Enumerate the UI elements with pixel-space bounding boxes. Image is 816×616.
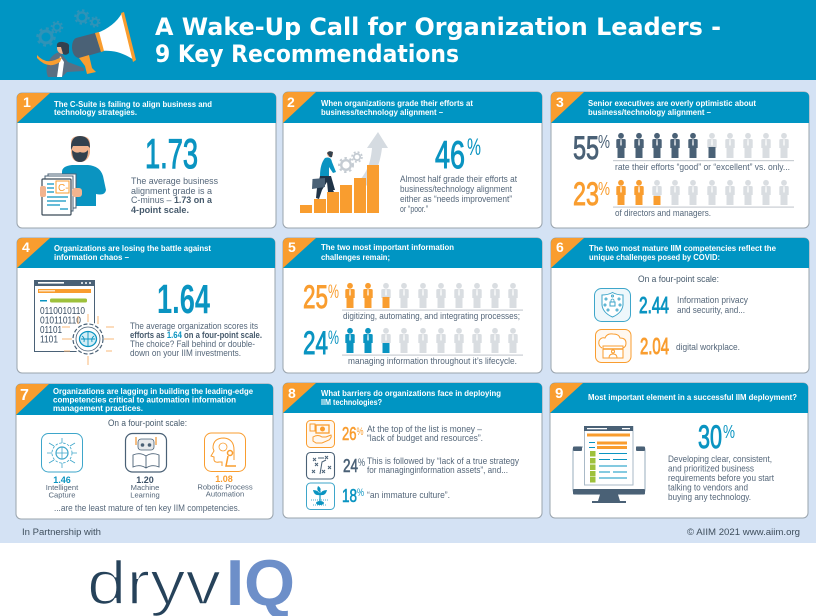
label: Automation: [206, 490, 244, 498]
panel 2: grading efforts: [283, 92, 542, 228]
stat: 23%: %: [598, 179, 610, 199]
label: [197, 482, 253, 498]
description: and prioritized business: [668, 464, 754, 474]
panel 5: information challenges: 5: [288, 239, 296, 255]
description: The average business: [131, 176, 218, 186]
stat: 25%: 25: [303, 279, 328, 315]
heading: When organizations grade their efforts at: [321, 98, 473, 108]
value: 1.20: [136, 475, 154, 485]
text: “lack of budget and resources”.: [367, 433, 483, 443]
heading: management practices.: [53, 403, 143, 413]
stat: 25%: %: [328, 282, 339, 303]
label: Machine: [131, 483, 159, 492]
heading: business/technology alignment –: [321, 107, 443, 117]
stat: 46%: %: [467, 134, 481, 161]
stat: 24%: 24: [343, 455, 358, 476]
description: either as “needs improvement”: [400, 194, 512, 204]
label: and security, and...: [677, 305, 745, 315]
stat: 30%: %: [723, 422, 735, 442]
stat: 1.64: 1.64: [157, 276, 210, 322]
stat: 18%: 18: [342, 485, 357, 506]
stat: 30%: 30: [698, 419, 722, 455]
stat: 55%: %: [598, 132, 610, 152]
header banner: [0, 0, 816, 80]
stat: 26%: 26: [342, 423, 356, 444]
description: talking to vendors and: [668, 482, 748, 492]
stat: 18%: %: [357, 487, 364, 499]
heading: Senior executives are overly optimistic about: [588, 98, 756, 108]
heading: [321, 98, 473, 117]
pictogram: 55 percent: [613, 133, 794, 161]
stat: 2.04: 2.04: [640, 333, 669, 359]
panel 6: mature competencies: 6: [556, 239, 564, 255]
panel 2: grading efforts: 2: [287, 94, 295, 110]
icon: monitor with checklist: [573, 426, 645, 503]
label: [677, 295, 748, 315]
caption: of directors and managers.: [615, 208, 711, 218]
caption: digitizing, automating, and integrating processes;: [343, 311, 520, 321]
subheading: On a four-point scale:: [108, 418, 187, 428]
heading: IIM technologies?: [321, 397, 382, 407]
closing note: ...are the least mature of ten key IIM competencies.: [54, 503, 240, 513]
icon: money in hand: [306, 420, 334, 448]
text: “an immature culture”.: [367, 490, 450, 500]
icon: gears: [38, 10, 100, 45]
icon: browser with binary code and brain gear: 0110010110: [40, 306, 85, 317]
description: 4-point scale.: [131, 205, 189, 215]
heading: [54, 99, 212, 117]
subheading: On a four-point scale:: [638, 274, 719, 284]
panel 9: most important element: [550, 383, 808, 518]
icon: shield with lock: [594, 288, 630, 322]
heading: Organizations are lagging in building the leading-edge: [53, 386, 253, 396]
description: [131, 176, 218, 215]
label: digital workplace.: [676, 342, 740, 352]
icon: browser with binary code and brain gear: 010110110: [40, 316, 81, 326]
heading: The two most mature IIM competencies reflect the: [589, 243, 776, 253]
caption: rate their efforts “good” or “excellent” vs. only...: [615, 162, 790, 172]
description: requirements before you start: [668, 473, 774, 483]
panel 3: senior executives: [551, 92, 809, 228]
panel 1: C-Suite alignment: 1: [23, 94, 31, 110]
label: Information privacy: [677, 295, 748, 305]
caption: managing information throughout it’s lifecycle.: [348, 356, 517, 366]
label: Robotic Process: [197, 482, 253, 492]
item: machine learning: [126, 434, 166, 500]
description: [400, 174, 517, 214]
stat: 55%: 55: [573, 130, 599, 166]
heading: [321, 388, 501, 407]
heading: The two most important information: [321, 242, 454, 252]
heading: business/technology alignment –: [588, 107, 711, 117]
icon: cloud and digital workplace: [596, 330, 631, 362]
description: C-minus – 1.73 on a: [131, 195, 213, 205]
icon: man holding report card: [40, 136, 106, 215]
panel 7: lagging competencies: [16, 384, 273, 519]
heading: [588, 98, 756, 117]
item: intelligent capture: [42, 434, 82, 500]
icon: browser with binary code and brain gear: 01101: [40, 325, 62, 336]
icon: man climbing steps: [300, 132, 388, 213]
panel 8: barriers: 8: [288, 385, 296, 401]
icon: robot reading: [126, 434, 166, 472]
stat: 1.73: 1.73: [145, 130, 198, 177]
panel 9: most important element: 9: [555, 385, 563, 402]
description: Almost half grade their efforts at: [400, 174, 517, 184]
icon: robot head profile: [204, 433, 246, 472]
label: [130, 483, 160, 500]
description: [130, 321, 262, 358]
text: This is followed by “lack of a true strategy: [367, 456, 519, 466]
stat: 46%: 46: [435, 134, 465, 177]
description: alignment grade is a: [131, 186, 213, 196]
heading: [589, 243, 776, 262]
text: for managinginformation assets”, and...: [367, 465, 508, 475]
panel 1: C-Suite alignment: [17, 93, 276, 228]
pictogram: 25 percent: [342, 283, 523, 311]
heading: technology strategies.: [54, 107, 137, 117]
text: [367, 456, 519, 475]
title: [155, 13, 721, 68]
panel 5: information challenges: [283, 238, 542, 373]
description: The average organization scores its: [130, 321, 258, 331]
heading: challenges remain;: [321, 252, 390, 262]
value: 1.46: [53, 475, 71, 485]
heading: [321, 242, 454, 262]
label: Intelligent: [46, 483, 79, 492]
heading: The C-Suite is failing to align business and: [54, 99, 212, 109]
pictogram: 24 percent: [342, 328, 523, 356]
heading: information chaos –: [54, 252, 129, 262]
logo: dryvIQ: dryv: [87, 549, 222, 616]
panel 3: senior executives: 3: [556, 94, 564, 110]
item: robotic process automation: [197, 433, 253, 498]
title: A Wake-Up Call for Organization Leaders -: [155, 13, 721, 41]
label: Learning: [130, 490, 160, 500]
stat: 24%: %: [358, 457, 365, 469]
icon: chip brain: [42, 434, 82, 472]
panel 6: mature competencies: [551, 238, 809, 373]
icon: browser with binary code and brain gear: 1101: [40, 334, 58, 346]
heading: [53, 386, 253, 413]
description: Developing clear, consistent,: [668, 454, 772, 464]
partnership note: In Partnership with: [22, 527, 101, 537]
title: 9 Key Recommendations: [155, 40, 459, 68]
heading: Organizations are losing the battle against: [54, 243, 211, 253]
stat: 24%: 24: [303, 325, 328, 361]
heading: unique challenges posed by COVID:: [589, 252, 720, 262]
text: At the top of the list is money –: [367, 424, 483, 434]
icon: strategy diagram: [306, 452, 334, 479]
heading: competencies critical to automation information: [53, 394, 236, 404]
icon: seedling: [306, 483, 334, 510]
panel 4: information chaos: [17, 238, 275, 373]
description: business/technology alignment: [400, 184, 512, 194]
stat: 2.44: 2.44: [639, 292, 669, 318]
description: [668, 454, 774, 502]
stat: 26%: %: [356, 426, 364, 438]
heading: What barriers do organizations face in deploying: [321, 388, 501, 398]
stat: 24%: %: [328, 328, 339, 349]
stat: 23%: 23: [573, 176, 599, 212]
description: buying any technology.: [668, 492, 751, 502]
description: The choice? Fall behind or double-: [130, 339, 255, 349]
panel 4: information chaos: 4: [22, 239, 30, 255]
description: efforts as 1.64 on a four-point scale.: [130, 330, 262, 340]
label: Capture: [48, 490, 76, 500]
label: [46, 483, 79, 500]
icon: megaphone and man: [37, 12, 136, 77]
copyright: © AIIM 2021 www.aiim.org: [687, 527, 800, 537]
icon: browser with binary code and brain gear: [34, 280, 114, 365]
icon: man holding report card: C-: [58, 183, 69, 194]
panel 7: lagging competencies: 7: [20, 387, 29, 404]
value: 1.08: [215, 474, 233, 484]
heading: Most important element in a successful IIM deployment?: [588, 392, 797, 402]
heading: [54, 243, 211, 262]
description: down on your IIM investments.: [130, 348, 241, 358]
description: or “poor.”: [400, 204, 428, 214]
pictogram: 23 percent: [613, 180, 794, 208]
logo: dryvIQ: [87, 546, 295, 616]
text: [367, 424, 483, 443]
panel 8: barriers: [283, 383, 542, 518]
